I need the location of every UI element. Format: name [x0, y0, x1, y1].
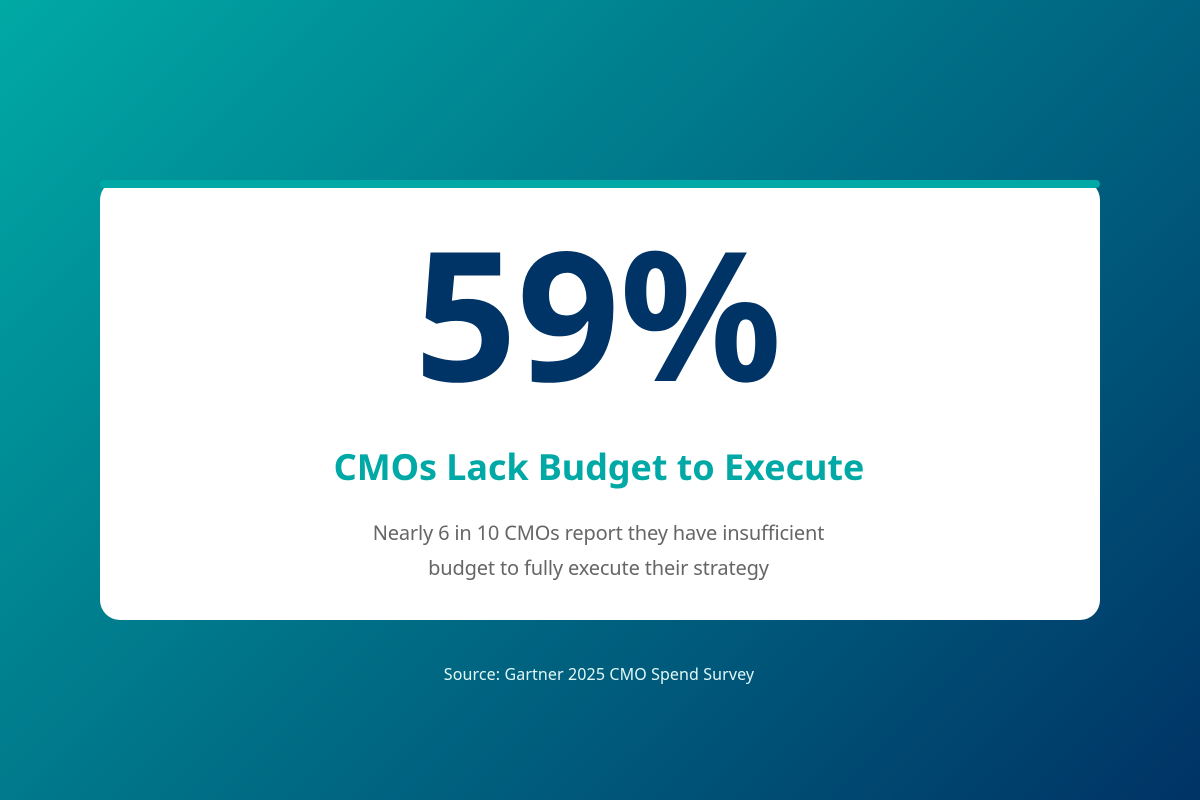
accent bar	[100, 180, 1100, 188]
big number: 59%: 59%	[414, 189, 782, 434]
description text	[373, 519, 824, 581]
heading: CMOs Lack Budget to Execute	[334, 442, 864, 491]
description text: Nearly 6 in 10 CMOs report they have insufficient	[373, 519, 824, 546]
source note: Source: Gartner 2025 CMO Spend Survey	[444, 663, 754, 685]
panel: stat card	[100, 180, 1100, 620]
description text: budget to fully execute their strategy	[428, 554, 769, 581]
